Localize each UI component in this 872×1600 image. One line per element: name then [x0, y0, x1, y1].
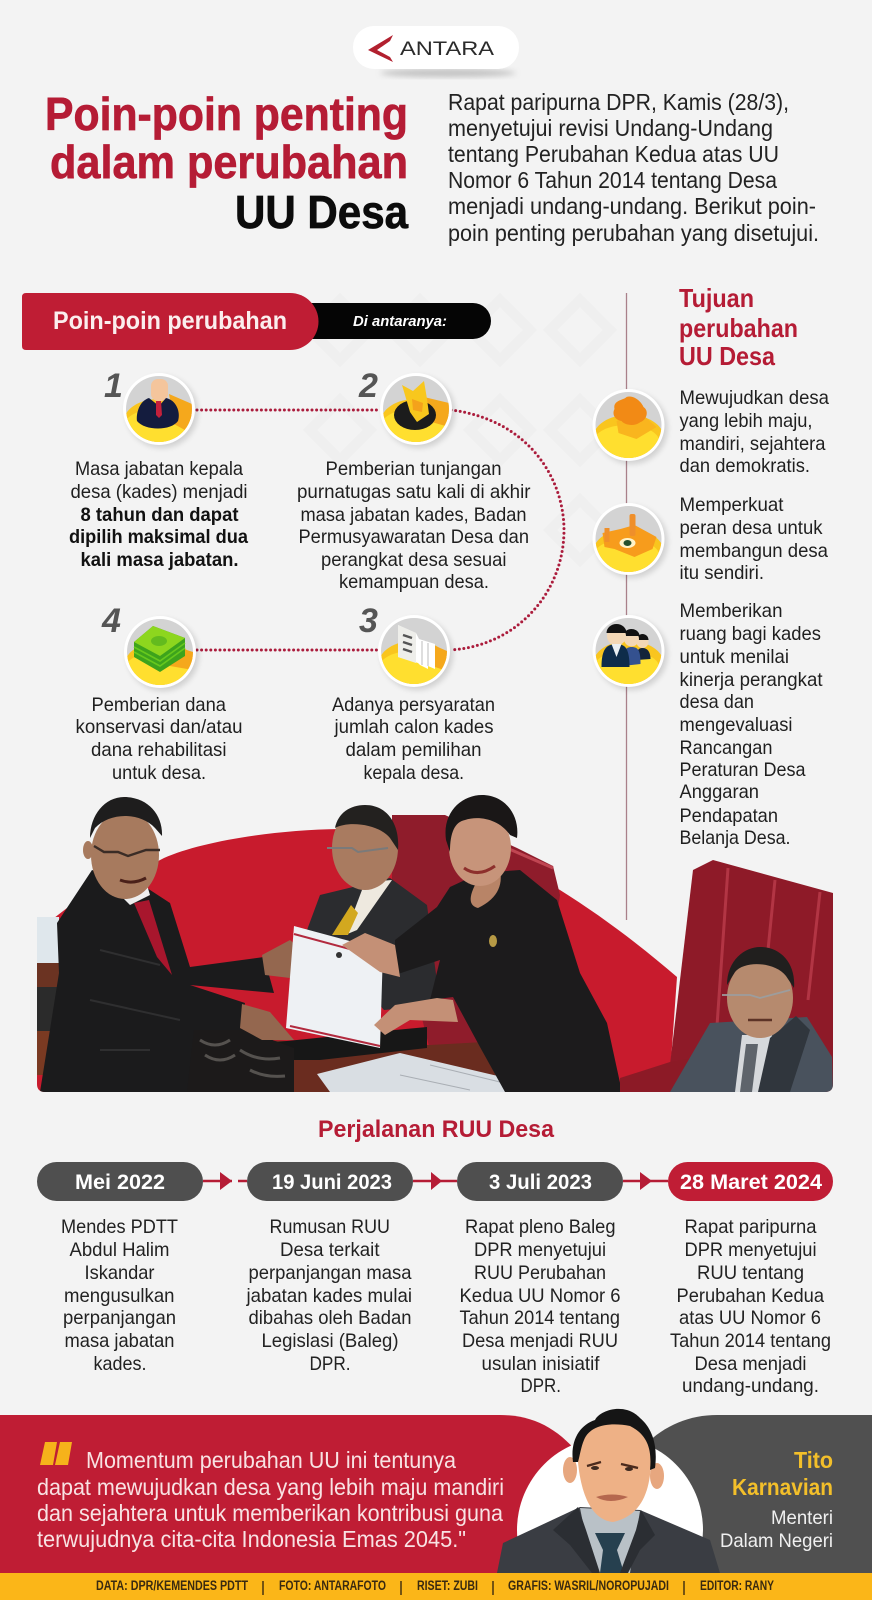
timeline column 3: DPR. — [520, 1375, 561, 1397]
step 1: kali masa jabatan. — [80, 549, 238, 571]
tujuan 1: dan demokratis. — [680, 455, 810, 477]
timeline column 3: Rapat pleno Baleg — [465, 1216, 616, 1238]
tujuan 2: membangun desa — [680, 540, 828, 562]
desk — [274, 1040, 496, 1092]
intro text: menyetujui revisi Undang-Undang — [448, 115, 773, 141]
timeline column 1 — [37, 1162, 203, 1375]
photo: DPR handover — [37, 795, 833, 1092]
title: UU Desa — [235, 186, 408, 238]
tujuan 3: kinerja perangkat — [680, 669, 823, 691]
speaker name — [720, 1447, 833, 1552]
step 2: masa jabatan kades, Badan — [300, 504, 526, 526]
timeline column 4: undang-undang. — [682, 1375, 819, 1397]
timeline column 1: Iskandar — [84, 1262, 155, 1284]
step 3: Adanya persyaratan — [332, 694, 495, 716]
tujuan 3: Memberikan — [680, 600, 782, 622]
timeline column 3: DPR menyetujui — [474, 1239, 606, 1261]
illustration: Tito Karnavian — [497, 1409, 720, 1573]
tujuan 1 — [592, 387, 829, 477]
timeline column 2: Legislasi (Baleg) — [262, 1330, 398, 1352]
step 3 — [332, 602, 495, 784]
title: Poin-poin penting — [45, 88, 408, 140]
tujuan 3: Rancangan — [680, 737, 772, 759]
face — [91, 811, 159, 899]
timeline column 2: perpanjangan masa — [248, 1262, 412, 1284]
step 1: dipilih maksimal dua — [69, 526, 248, 548]
quote text: terwujudnya cita-cita Indonesia Emas 2045." — [37, 1526, 466, 1552]
intro text: poin penting perubahan yang disetujui. — [448, 220, 819, 246]
tujuan 3: untuk menilai — [680, 646, 789, 668]
timeline column 2: 19 Juni 2023 — [272, 1171, 392, 1194]
step 1: desa (kades) menjadi — [70, 481, 248, 503]
intro text — [448, 89, 819, 246]
quote text — [37, 1447, 504, 1552]
tujuan 2: Memperkuat — [680, 494, 784, 516]
step 2: 2 — [358, 367, 378, 405]
timeline column 2: DPR. — [310, 1353, 350, 1375]
tujuan 2: itu sendiri. — [680, 562, 764, 584]
document — [286, 926, 383, 1048]
step 1: 1 — [104, 367, 123, 405]
timeline column 3: Kedua UU Nomor 6 — [460, 1285, 620, 1307]
timeline column 4: Rapat paripurna — [684, 1216, 817, 1238]
step 3: dalam pemilihan — [346, 739, 482, 761]
timeline column 1: masa jabatan — [64, 1330, 174, 1352]
tujuan 3: Anggaran — [680, 781, 759, 803]
hands — [262, 940, 293, 978]
tujuan 3: desa dan — [680, 691, 754, 713]
footer credits: RISET: ZUBI — [417, 1578, 478, 1593]
timeline column 2: Desa terkait — [280, 1239, 380, 1261]
step 2: Pemberian tunjangan — [326, 458, 502, 480]
footer credits: GRAFIS: WASRIL/NOROPUJADI — [508, 1578, 669, 1593]
logo: ANTARA — [353, 26, 519, 77]
footer credits: FOTO: ANTARAFOTO — [279, 1578, 386, 1593]
intro text: menjadi undang-undang. Berikut poin- — [448, 193, 816, 219]
tujuan 2 — [592, 494, 828, 584]
quote text: dapat mewujudkan desa yang lebih maju mandiri — [37, 1474, 504, 1500]
timeline column 1: perpanjangan — [63, 1307, 176, 1329]
quote text: Momentum perubahan UU ini tentunya — [86, 1447, 456, 1473]
step 3: kepala desa. — [364, 762, 464, 784]
woman — [342, 795, 622, 1092]
timeline arrows — [203, 1172, 668, 1190]
footer credits: DATA: DPR/KEMENDES PDTT — [96, 1578, 249, 1593]
footer credits — [0, 1573, 872, 1600]
timeline column 4: atas UU Nomor 6 — [679, 1307, 821, 1329]
tujuan 1: yang lebih maju, — [680, 410, 812, 432]
step 1: 8 tahun dan dapat — [80, 504, 239, 526]
timeline column 4: Desa menjadi — [694, 1353, 806, 1375]
step 3: jumlah calon kades — [334, 716, 494, 738]
left desk items — [37, 917, 59, 1075]
title: dalam perubahan — [50, 136, 408, 188]
heading: Tujuan: UU Desa — [679, 341, 775, 371]
timeline column 2: Rumusan RUU — [270, 1216, 390, 1238]
tujuan 1: mandiri, sejahtera — [680, 433, 826, 455]
dotted connector — [197, 410, 564, 650]
step 4: Pemberian dana — [92, 694, 226, 716]
step 4: 4 — [101, 602, 121, 640]
step 1 — [69, 367, 248, 571]
step 2: Permusyawaratan Desa dan — [298, 526, 529, 548]
timeline column 2: dibahas oleh Badan — [248, 1307, 412, 1329]
heading: Perjalanan RUU Desa: Perjalanan RUU Desa — [318, 1116, 555, 1143]
tujuan 3: Peraturan Desa — [680, 759, 806, 781]
panel header: Poin-poin perubahan: Poin-poin perubahan — [53, 307, 287, 335]
title — [45, 88, 408, 238]
timeline column 3 — [457, 1162, 623, 1397]
standing man — [40, 797, 304, 1092]
icon: quote mark — [40, 1442, 72, 1465]
step 4: untuk desa. — [112, 762, 206, 784]
panel header: Poin-poin perubahan: Di antaranya: — [353, 313, 447, 330]
tujuan 3: ruang bagi kades — [680, 623, 821, 645]
panel header: Poin-poin perubahan — [22, 293, 491, 350]
keyboard — [277, 1027, 427, 1060]
quote text: dan sejahtera untuk memberikan kontribusi guna — [37, 1500, 503, 1526]
step 3: 3 — [359, 602, 378, 640]
timeline column 4 — [668, 1162, 833, 1397]
step 2: perangkat desa sesuai — [321, 549, 506, 571]
right chair — [669, 860, 833, 1092]
ornate black panel — [187, 1028, 294, 1092]
timeline column 4: 28 Maret 2024 — [680, 1171, 822, 1194]
heading: Tujuan — [679, 283, 798, 371]
speaker name: Tito — [794, 1447, 833, 1473]
tujuan 3 — [592, 600, 823, 849]
seated man right — [670, 947, 833, 1092]
red backdrop — [37, 829, 677, 1092]
timeline column 4: Perubahan Kedua — [676, 1285, 824, 1307]
timeline column 4: DPR menyetujui — [684, 1239, 816, 1261]
logo: ANTARA: ANTARA — [400, 39, 494, 60]
tujuan 3: mengevaluasi — [680, 714, 792, 736]
timeline column 2 — [246, 1162, 413, 1375]
tujuan 2: peran desa untuk — [680, 517, 823, 539]
step 2: purnatugas satu kali di akhir — [297, 481, 531, 503]
timeline column 1: Mendes PDTT — [61, 1216, 178, 1238]
step 4: konservasi dan/atau — [76, 716, 242, 738]
timeline column 1: mengusulkan — [64, 1285, 174, 1307]
timeline column 1: Mei 2022 — [75, 1171, 165, 1194]
vertical divider — [626, 293, 628, 920]
intro text: tentang Perubahan Kedua atas UU — [448, 141, 779, 167]
timeline column 3: Tahun 2014 tentang — [460, 1307, 620, 1329]
timeline column 4: Tahun 2014 tentang — [670, 1330, 831, 1352]
timeline column 3: RUU Perubahan — [474, 1262, 606, 1284]
tujuan 3: Belanja Desa. — [680, 827, 790, 849]
rear chair — [392, 815, 560, 1060]
quote band — [0, 1408, 872, 1573]
step 2 — [297, 367, 531, 593]
speaker name: Dalam Negeri — [720, 1530, 833, 1552]
step 2: kemampuan desa. — [339, 571, 489, 593]
seated man — [307, 805, 440, 1010]
speaker name: Karnavian — [732, 1474, 833, 1500]
step 4: dana rehabilitasi — [91, 739, 226, 761]
timeline column 3: usulan inisiatif — [482, 1353, 600, 1375]
speaker name: Menteri — [771, 1507, 833, 1529]
footer credits: EDITOR: RANY — [700, 1578, 774, 1593]
intro text: Nomor 6 Tahun 2014 tentang Desa — [448, 167, 777, 193]
timeline column 3: 3 Juli 2023 — [489, 1171, 592, 1194]
tujuan 3: Pendapatan — [680, 805, 778, 827]
intro text: Rapat paripurna DPR, Kamis (28/3), — [448, 89, 789, 115]
timeline column 4: RUU tentang — [697, 1262, 804, 1284]
timeline column 1: kades. — [94, 1353, 146, 1375]
step 1: Masa jabatan kepala — [75, 458, 243, 480]
tujuan 1: Mewujudkan desa — [680, 387, 829, 409]
timeline column 1: Abdul Halim — [70, 1239, 170, 1261]
papers on desk — [317, 1053, 520, 1092]
heading: Tujuan: perubahan — [679, 313, 798, 343]
heading: Tujuan: Tujuan — [679, 283, 754, 313]
timeline column 3: Desa menjadi RUU — [462, 1330, 618, 1352]
timeline column 2: jabatan kades mulai — [246, 1285, 412, 1307]
step 4 — [76, 602, 242, 784]
